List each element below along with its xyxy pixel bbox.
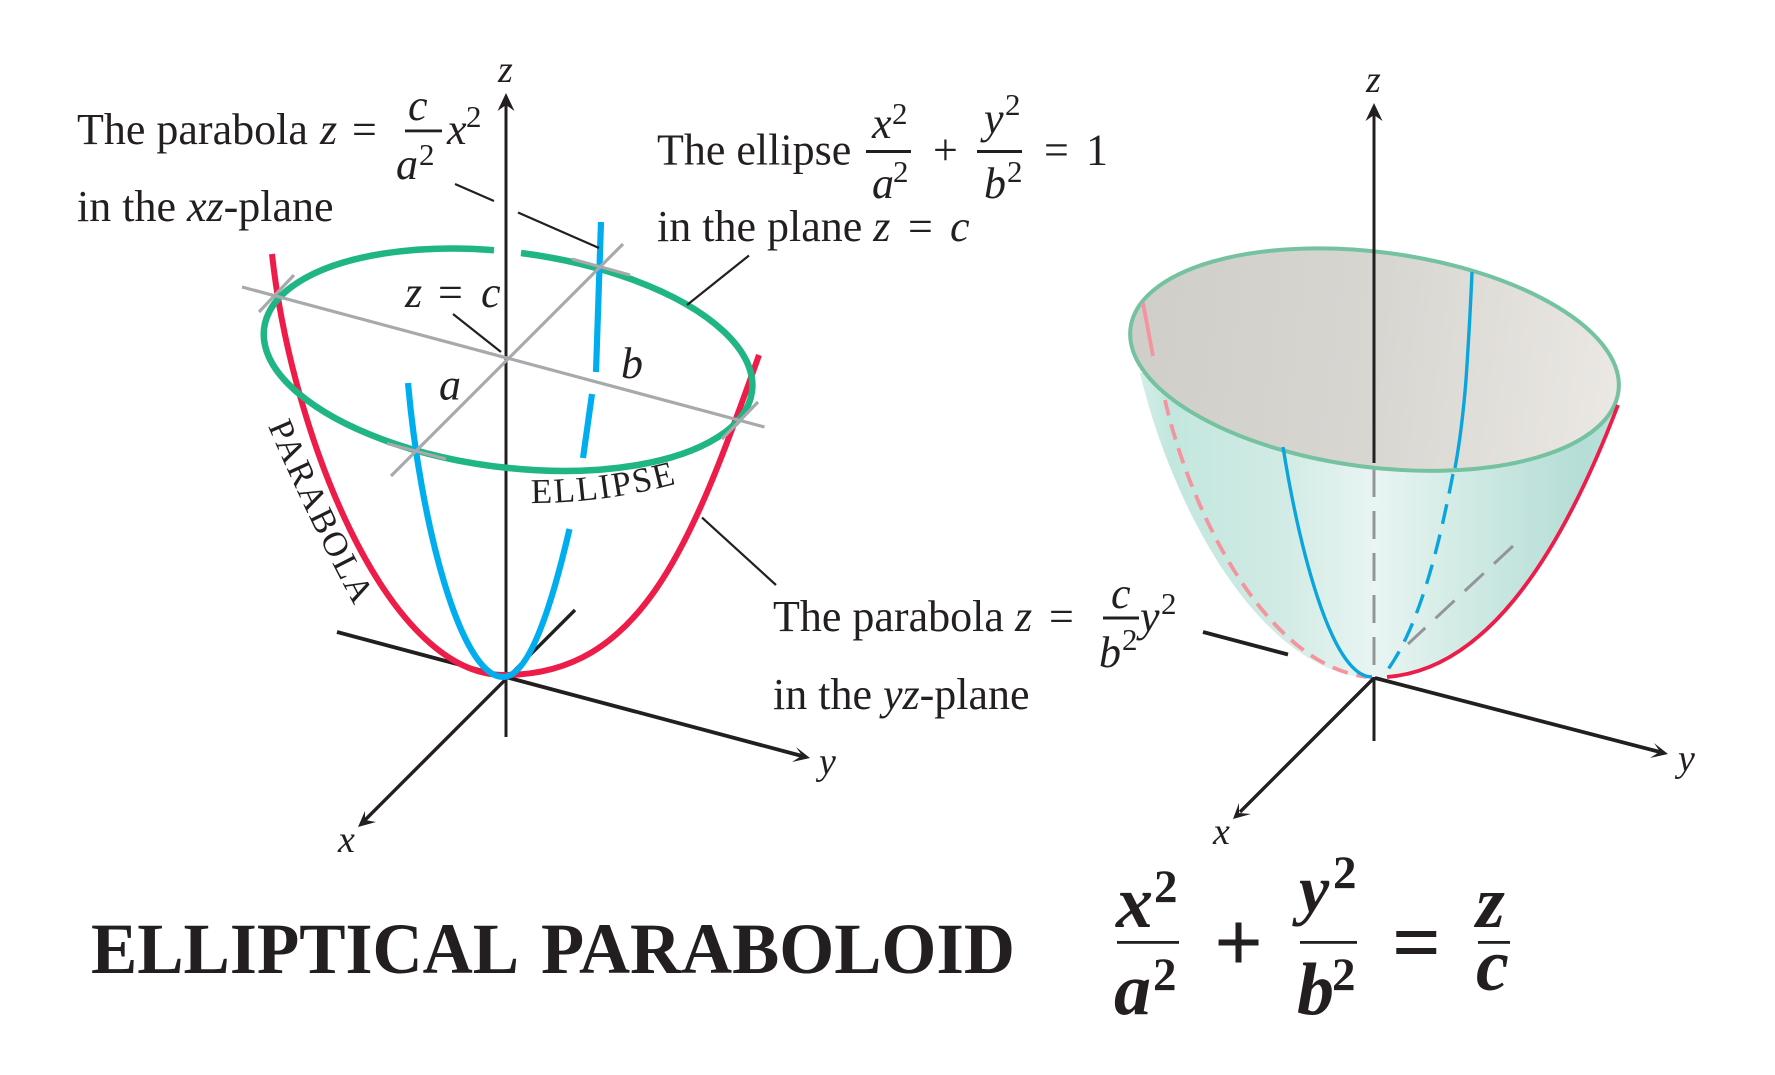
label: ellipse in the plane z = c: = — [1044, 126, 1069, 174]
equation of the elliptical paraboloid: 2 — [1333, 847, 1356, 899]
label: z = c — [404, 268, 501, 317]
label: b: b — [621, 339, 643, 388]
label: ellipse in the plane z = c: 2 — [1007, 154, 1022, 189]
label: ellipse in the plane z = c: 2 — [893, 154, 908, 189]
axis labels (right): z — [1365, 59, 1381, 101]
z axis (left) — [498, 93, 514, 737]
green ellipse — [264, 249, 752, 471]
equation of the elliptical paraboloid: b — [1297, 949, 1334, 1031]
label: parabola in the yz-plane: The parabola — [773, 592, 1004, 641]
blue parabola in the xz-plane — [408, 222, 601, 677]
label: parabola in the yz-plane: 2 — [1161, 586, 1176, 621]
label: a: a — [439, 360, 461, 410]
label: parabola in the xz-plane — [77, 81, 482, 231]
curve label: PARABOLA: PARABOLA — [268, 418, 370, 606]
label: parabola in the xz-plane: The parabola — [77, 105, 308, 154]
label: parabola in the xz-plane: a — [396, 140, 418, 189]
label: parabola in the xz-plane: x — [446, 105, 467, 154]
equation of the elliptical paraboloid: y — [1292, 851, 1330, 927]
y axis (left) — [337, 632, 810, 762]
label: parabola in the yz-plane: 2 — [1122, 622, 1138, 657]
equation of the elliptical paraboloid — [1114, 847, 1510, 1031]
label: ellipse in the plane z = c — [657, 87, 1108, 251]
leader lines — [453, 184, 776, 585]
equation of the elliptical paraboloid: + — [1214, 894, 1263, 990]
axis labels (right) — [1212, 59, 1695, 853]
label: parabola in the xz-plane: 2 — [419, 137, 434, 172]
label: ellipse in the plane z = c: The ellipse — [657, 126, 851, 174]
label: parabola in the yz-plane — [773, 569, 1176, 719]
label: ellipse in the plane z = c: 2 — [1005, 87, 1020, 122]
curve label: ELLIPSE: ELLIPSE — [532, 462, 674, 504]
label: ellipse in the plane z = c: 1 — [1086, 126, 1108, 174]
label: z = c: z — [404, 268, 422, 317]
equation of the elliptical paraboloid: z — [1473, 862, 1505, 944]
label: z = c: c — [481, 268, 501, 317]
z axis (right) — [1366, 103, 1382, 741]
axis labels (right): y — [1674, 738, 1695, 780]
gray dashed z axis behind surface — [1372, 469, 1376, 668]
equation of the elliptical paraboloid: 2 — [1154, 861, 1178, 913]
label: parabola in the xz-plane: c — [408, 81, 428, 130]
gray dashed x axis behind surface — [1408, 546, 1513, 644]
equation of the elliptical paraboloid: 2 — [1153, 949, 1176, 1001]
red parabola in the yz-plane — [272, 254, 759, 675]
label: parabola in the xz-plane: z — [319, 105, 337, 154]
equation of the elliptical paraboloid: a — [1114, 949, 1151, 1031]
label: parabola in the xz-plane: 2 — [466, 99, 482, 134]
label: parabola in the yz-plane: y — [1136, 592, 1160, 641]
label: ellipse in the plane z = c: b — [984, 159, 1006, 208]
pink hidden parabola — [1143, 303, 1367, 677]
label: ellipse in the plane z = c: a — [872, 159, 894, 208]
label: z = c: = — [438, 268, 463, 317]
blue parabola on surface — [1283, 272, 1472, 677]
x axis (left) — [358, 610, 575, 827]
label: ellipse in the plane z = c: + — [933, 126, 958, 174]
axis labels (left): y — [815, 741, 836, 783]
label: parabola in the yz-plane: z — [1014, 592, 1032, 641]
paraboloid outer surface — [1140, 360, 1618, 678]
label: parabola in the yz-plane: = — [1049, 592, 1074, 641]
y axis (right) — [1203, 632, 1668, 758]
equation of the elliptical paraboloid: x — [1115, 862, 1153, 944]
equation of the elliptical paraboloid: c — [1476, 925, 1509, 1007]
label: parabola in the yz-plane: c — [1111, 569, 1131, 618]
gray semi-axes a and b with ticks — [242, 244, 764, 476]
axis labels (left): z — [497, 49, 513, 91]
label: ellipse in the plane z = c: x — [871, 99, 892, 148]
equation of the elliptical paraboloid: = — [1392, 894, 1441, 990]
axis labels (left): x — [337, 819, 355, 861]
title: PARABOLOID — [541, 909, 1015, 989]
left figure: curves and axes — [242, 93, 810, 827]
axis labels (left) — [337, 49, 836, 861]
x axis (right) — [1233, 678, 1374, 819]
label: parabola in the xz-plane: = — [352, 105, 377, 154]
title — [91, 909, 1015, 989]
label: ellipse in the plane z = c: = — [908, 202, 933, 251]
red parabola on surface — [1387, 405, 1618, 677]
axis labels (right): x — [1212, 811, 1230, 853]
label: ellipse in the plane z = c: in the plane z — [657, 202, 890, 251]
label: ellipse in the plane z = c: 2 — [892, 96, 908, 131]
label: parabola in the yz-plane: in the yz-plane — [773, 670, 1030, 719]
label: parabola in the yz-plane: b — [1099, 628, 1121, 677]
rim and interior of the paraboloid — [1117, 221, 1632, 498]
right figure: shaded paraboloid — [1117, 103, 1668, 819]
label: ellipse in the plane z = c: c — [950, 202, 970, 251]
equation of the elliptical paraboloid: 2 — [1332, 949, 1356, 1001]
label: parabola in the xz-plane: in the xz-plane — [77, 182, 334, 231]
label: ellipse in the plane z = c: y — [980, 94, 1004, 143]
title: ELLIPTICAL — [91, 909, 519, 989]
